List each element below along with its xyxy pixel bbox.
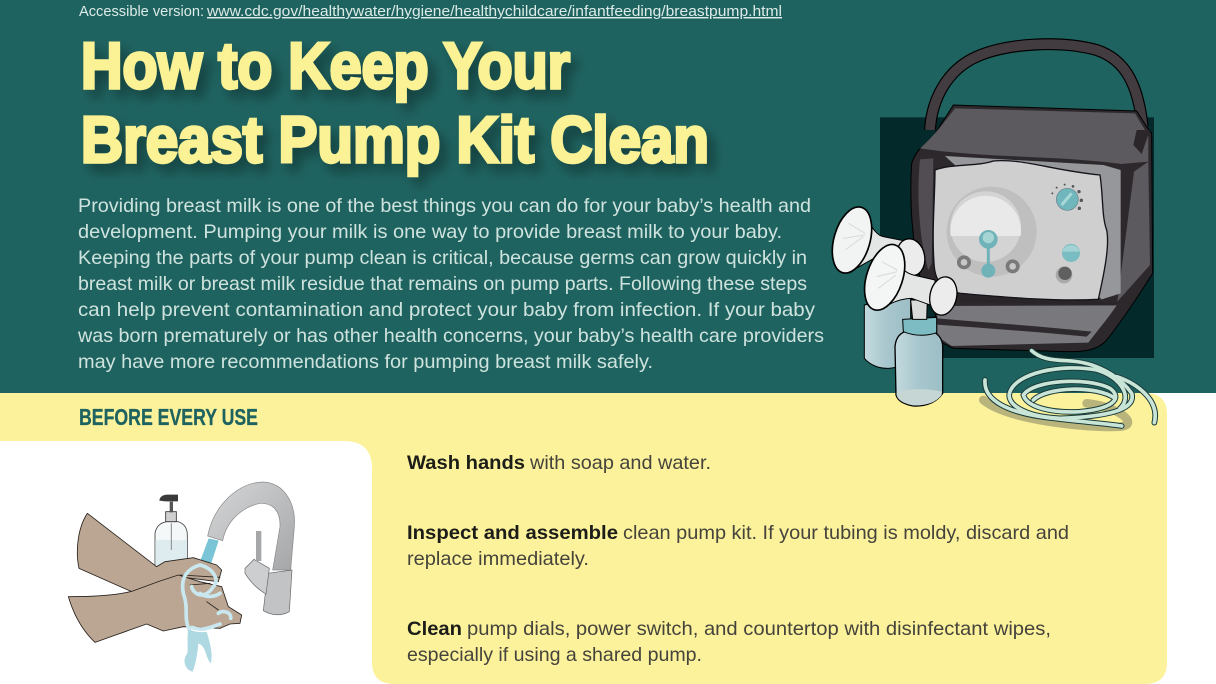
icon: front bottle and flange [857,239,960,406]
icon: faucet [208,482,295,615]
step: inspect and assemble [407,522,1069,570]
intro paragraph: may have more recommendations for pumping breast milk safely. [78,351,653,373]
icon: breast pump kit illustration [825,44,1155,427]
section heading: before every use: BEFORE EVERY USE [79,404,258,430]
step: wash hands: Wash hands [407,452,525,474]
title: How to Keep Your [81,29,570,102]
icon: water stream [200,538,219,565]
yellow steps panel [0,393,1167,684]
step: clean: Clean [407,618,462,640]
intro paragraph: Keeping the parts of your pump clean is critical, because germs can grow quickly in [78,247,807,269]
icon: back bottle and flange [825,202,928,368]
intro paragraph: breast milk or breast milk residue that remains on pump parts. Following these steps [78,273,807,295]
white illustration panel [0,441,394,684]
accessible version link line: Accessible version: [79,4,204,20]
intro paragraph [77,195,824,373]
icon: hand washing illustration [68,482,295,672]
intro paragraph: development. Pumping your milk is one way to provide breast milk to your baby. [78,221,782,243]
icon: soap suds and runoff [183,565,231,632]
step: clean: pump dials, power switch, and countertop with disinfectant wipes, [467,618,1051,640]
accessible version link line: www.cdc.gov/healthywater/hygiene/healthychildcare/infantfeeding/breastpump.html [206,4,782,20]
teal header panel [0,0,1216,393]
step: inspect and assemble: clean pump kit. If your tubing is moldy, discard and [623,522,1069,544]
step: inspect and assemble: Inspect and assemble [407,522,618,544]
intro paragraph: Providing breast milk is one of the best things you can do for your baby’s health and [78,195,811,217]
step: wash hands: with soap and water. [529,452,711,474]
intro paragraph: can help prevent contamination and protect your baby from infection. If your baby [78,299,815,321]
step: clean: especially if using a shared pump. [407,644,702,666]
step: inspect and assemble: replace immediately. [407,548,589,570]
title: Breast Pump Kit Clean [81,103,709,176]
step: wash hands [407,452,711,474]
intro paragraph: was born prematurely or has other health concerns, your baby’s health care providers [77,325,824,347]
icon: washing hands [68,513,242,642]
title [81,29,709,176]
step: clean [407,618,1051,666]
icon: soap dispenser [155,495,187,567]
icon: coiled tubing [983,351,1155,427]
